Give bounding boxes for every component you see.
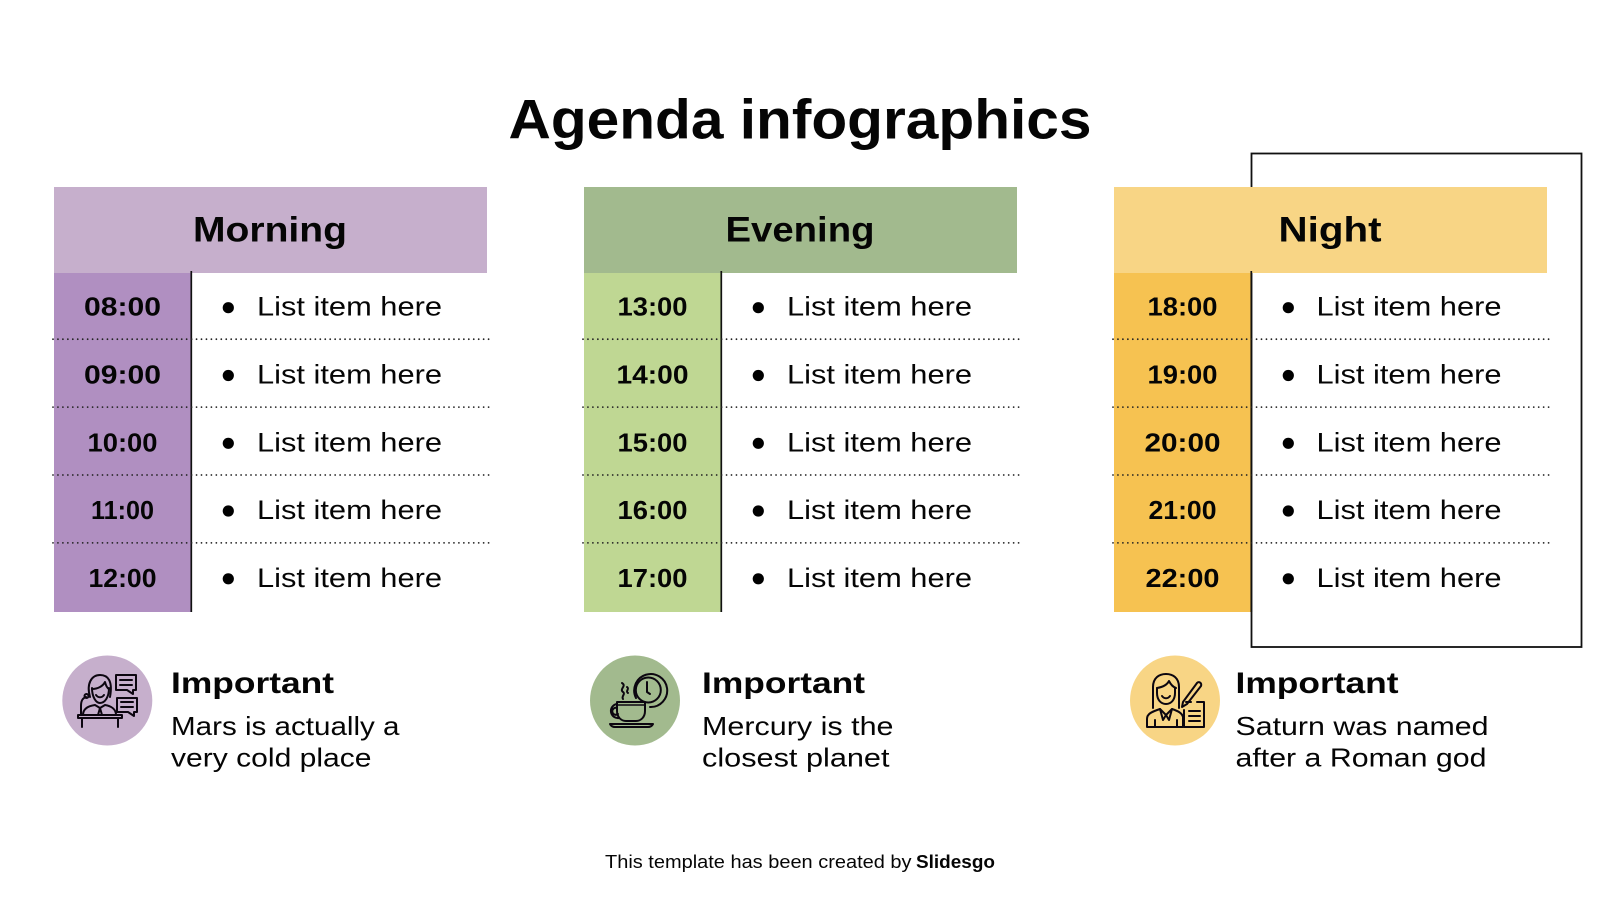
callout: evening important: Mercury is the (702, 711, 894, 741)
evening time column (584, 273, 721, 612)
evening list items: List item here (787, 360, 972, 390)
night time column: 21:00 (1148, 495, 1216, 525)
night list items (1283, 292, 1502, 593)
callout: morning important: Mars is actually a (171, 711, 400, 741)
evening list items: List item here (787, 292, 972, 322)
night list items: List item here (1316, 427, 1502, 457)
evening time column: 16:00 (618, 495, 688, 525)
callout: morning important: Important (171, 667, 334, 700)
night time column: 18:00 (1148, 292, 1218, 322)
night header: Night (1278, 211, 1382, 250)
panel: morning (53, 187, 491, 612)
icon: student with pen and paper (1130, 656, 1220, 746)
morning time column: 10:00 (88, 427, 158, 457)
evening list items: List item here (787, 563, 972, 593)
night time column: 22:00 (1146, 563, 1220, 593)
morning time column: 09:00 (84, 360, 161, 390)
callout: night important: Saturn was named (1236, 711, 1488, 741)
evening time column: 17:00 (618, 563, 688, 593)
callout: evening important (702, 667, 894, 773)
evening time column: 14:00 (616, 360, 688, 390)
callout: night important: after a Roman god (1236, 743, 1486, 773)
morning time column: 12:00 (88, 563, 156, 593)
title: Agenda infographics (508, 88, 1092, 150)
callout: evening important: Important (702, 667, 865, 700)
night list items: List item here (1316, 563, 1502, 593)
frame: outline behind night panel (1252, 154, 1582, 647)
panel: night (1113, 187, 1551, 612)
callout: night important (1236, 667, 1488, 773)
morning list items: List item here (257, 292, 442, 322)
night time column: 20:00 (1144, 427, 1220, 457)
callout: morning important (171, 667, 400, 773)
morning list items: List item here (257, 427, 442, 457)
panel: evening (583, 187, 1021, 612)
morning header: Morning (193, 211, 347, 250)
footer credit: Slidesgo (916, 851, 995, 872)
night time column (1114, 273, 1251, 612)
evening list items (753, 292, 972, 593)
evening header (584, 187, 1017, 273)
callout: night important: Important (1236, 667, 1399, 700)
icon: coffee cup and clock (590, 656, 680, 746)
morning header (54, 187, 487, 273)
footer credit: This template has been created by (605, 852, 912, 872)
morning list items (223, 292, 442, 593)
night list items: List item here (1316, 360, 1502, 390)
night header (1114, 187, 1547, 273)
evening time column: 13:00 (618, 292, 688, 322)
footer credit (605, 851, 995, 872)
morning list items: List item here (257, 495, 442, 525)
night list items: List item here (1316, 292, 1502, 322)
evening list items: List item here (787, 427, 972, 457)
morning list items: List item here (257, 360, 442, 390)
evening header: Evening (726, 211, 874, 250)
icon: speaker at podium (62, 656, 152, 746)
morning time column (54, 273, 191, 612)
night time column: 19:00 (1148, 360, 1218, 390)
callout: evening important: closest planet (702, 743, 890, 773)
morning list items: List item here (257, 563, 442, 593)
evening time column: 15:00 (618, 427, 688, 457)
night list items: List item here (1316, 495, 1502, 525)
morning time column: 11:00 (91, 495, 154, 525)
callout: morning important: very cold place (171, 743, 372, 773)
morning time column: 08:00 (84, 292, 161, 322)
evening list items: List item here (787, 495, 972, 525)
